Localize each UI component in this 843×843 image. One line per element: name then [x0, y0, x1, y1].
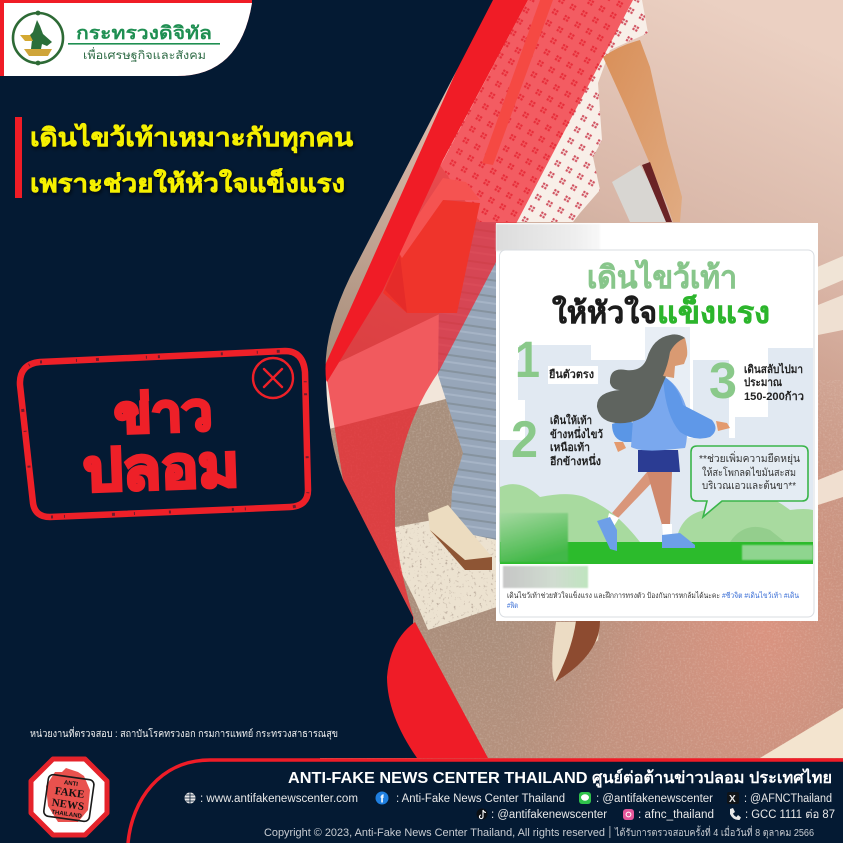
icon: x [727, 792, 739, 805]
icon: anti fake news stop sign [31, 759, 107, 835]
contact links row 1: : Anti-Fake News Center Thailand [396, 793, 565, 805]
photo: jeans [438, 222, 497, 540]
step 2 text [550, 413, 603, 468]
hair [597, 334, 685, 423]
photo: front shoe [552, 621, 600, 682]
contact links row 1: : @antifakenewscenter [596, 793, 713, 805]
footer band [0, 759, 843, 843]
step 3 text [744, 362, 804, 403]
card title: เดินไขว้เท้า [587, 259, 737, 295]
phone number: : GCC 1111 ต่อ 87 [745, 809, 835, 821]
icon: instagram [623, 809, 634, 820]
hand back [614, 442, 626, 452]
post caption: #ชีวจิต #เดินไขว้เท้า #เดิน [722, 591, 799, 600]
stamp text: ปลอม [82, 433, 240, 504]
logo panel: ministry of digital [0, 0, 252, 76]
icon: facebook [376, 792, 388, 806]
icon: facebook: f [380, 794, 384, 806]
socks [607, 513, 672, 535]
contact links row 2: : @antifakenewscenter [491, 809, 607, 821]
skirt [638, 450, 680, 472]
copyright line: Copyright © 2023, Anti-Fake News Center Thailand, All rights reserved [264, 827, 605, 839]
illustration: woman walking [597, 334, 730, 551]
face [663, 338, 687, 378]
card title: แข็งแรง [657, 294, 770, 330]
source agency note: หน่วยงานที่ตรวจสอบ : สถาบันโรคทรวงอก กรมการแพทย์ กระทรวงสาธารณสุข [30, 726, 338, 740]
photo: blouse [440, 0, 648, 222]
blurred name patch [503, 566, 588, 588]
stamp text [80, 382, 240, 504]
step 2 text: ข้างหนึ่งไขว้ [550, 426, 603, 441]
sweater sleeve [663, 376, 716, 439]
step 1 text: ยืนตัวตรง [548, 368, 594, 381]
back shoe [597, 517, 617, 551]
copyright line [264, 825, 814, 839]
footer title: ANTI-FAKE NEWS CENTER THAILAND ศูนย์ต่อต้านข่าวปลอม ประเทศไทย [288, 768, 832, 789]
illustration: grass strip [500, 542, 813, 564]
card title: ให้หัวใจ [552, 295, 657, 330]
contact links row 2: : afnc_thailand [638, 809, 714, 821]
post caption [507, 590, 799, 610]
ministry tagline: เพื่อเศรษฐกิจและสังคม [83, 47, 206, 62]
icon: ministry emblem [13, 11, 63, 65]
number 2: 2 [511, 411, 538, 469]
blurred patch left [500, 513, 568, 562]
sweater body [631, 376, 687, 451]
copyright line: ได้รับการตรวจสอบครั้งที่ 4 เมื่อวันที่ 8 ตุลาคม 2566 [614, 825, 814, 839]
number 1: 1 [515, 331, 540, 388]
back sleeve [612, 420, 640, 442]
hand front [716, 421, 730, 431]
illustration: hills [500, 484, 813, 542]
icon: phone [730, 808, 741, 820]
contact links row 1: : www.antifakenewscenter.com [200, 793, 358, 805]
dark navy panel shape [0, 0, 493, 758]
stamp: fake news [20, 351, 308, 517]
icon: anti fake news stop sign: FAKE [54, 785, 85, 801]
callout: benefits: บริเวณเอวและต้นขา** [702, 480, 796, 492]
contact links row 1: : @AFNCThailand [744, 793, 832, 805]
step 2 text: อีกข้างหนึ่ง [550, 453, 601, 468]
heading accent bar [15, 117, 22, 198]
translucent red overlay band [327, 0, 633, 622]
main heading [30, 122, 353, 198]
illustration backdrop: city [500, 327, 813, 542]
step 2 text: เดินให้เท้า [550, 413, 592, 427]
post caption: เดินไขว้เท้าช่วยหัวใจแข็งแรง และฝึกการทรงตัว ป้องกันการหกล้มได้นะคะ [507, 590, 720, 600]
number 3: 3 [709, 352, 737, 409]
front shoe [662, 533, 695, 548]
blurred profile patch [496, 224, 600, 251]
icon: x circle [253, 358, 293, 398]
stamp text: ข่าว [113, 383, 213, 445]
callout: benefits: **ช่วยเพิ่มความยืดหยุ่น [699, 451, 800, 465]
contact links row 2 [476, 808, 835, 821]
card title [552, 259, 770, 330]
callout: benefits: ให้สะโพกลดไขมันสะสม [702, 466, 796, 479]
step 3 text: ประมาณ [744, 376, 783, 389]
icon: anti fake news stop sign: NEWS [51, 797, 85, 813]
front leg [647, 472, 672, 525]
contact links row 1 [184, 792, 832, 806]
photo: book [612, 162, 672, 222]
photo: bag strap [482, 0, 553, 165]
pure red band [322, 0, 528, 382]
red curved accent shape [387, 622, 488, 758]
icon: x: X [729, 794, 736, 805]
step 3 text: เดินสลับไปมา [744, 362, 803, 376]
back leg [612, 472, 660, 518]
main heading: เดินไขว้เท้าเหมาะกับทุกคน [30, 122, 353, 154]
ministry name: กระทรวงดิจิทัล [76, 23, 212, 43]
icon: line [579, 792, 591, 804]
photo: back shoe [428, 505, 492, 570]
photo: arm [603, 40, 682, 222]
icon: anti fake news stop sign: THAILAND [51, 810, 83, 820]
post caption: #ฟิต [507, 601, 518, 610]
photo: woman walking on crosswalk [320, 0, 843, 760]
social post card [496, 223, 818, 621]
icon: tiktok [476, 808, 488, 820]
icon: anti fake news stop sign: ANTI [63, 780, 78, 788]
icon: globe [184, 792, 196, 804]
main heading: เพราะช่วยให้หัวใจแข็งแรง [30, 168, 345, 198]
callout: benefits [691, 446, 808, 517]
step 3 text: 150-200ก้าว [744, 390, 804, 403]
photo: red bag [383, 178, 480, 313]
step 2 text: เหนือเท้า [550, 441, 590, 454]
blurred patch right [742, 545, 813, 560]
